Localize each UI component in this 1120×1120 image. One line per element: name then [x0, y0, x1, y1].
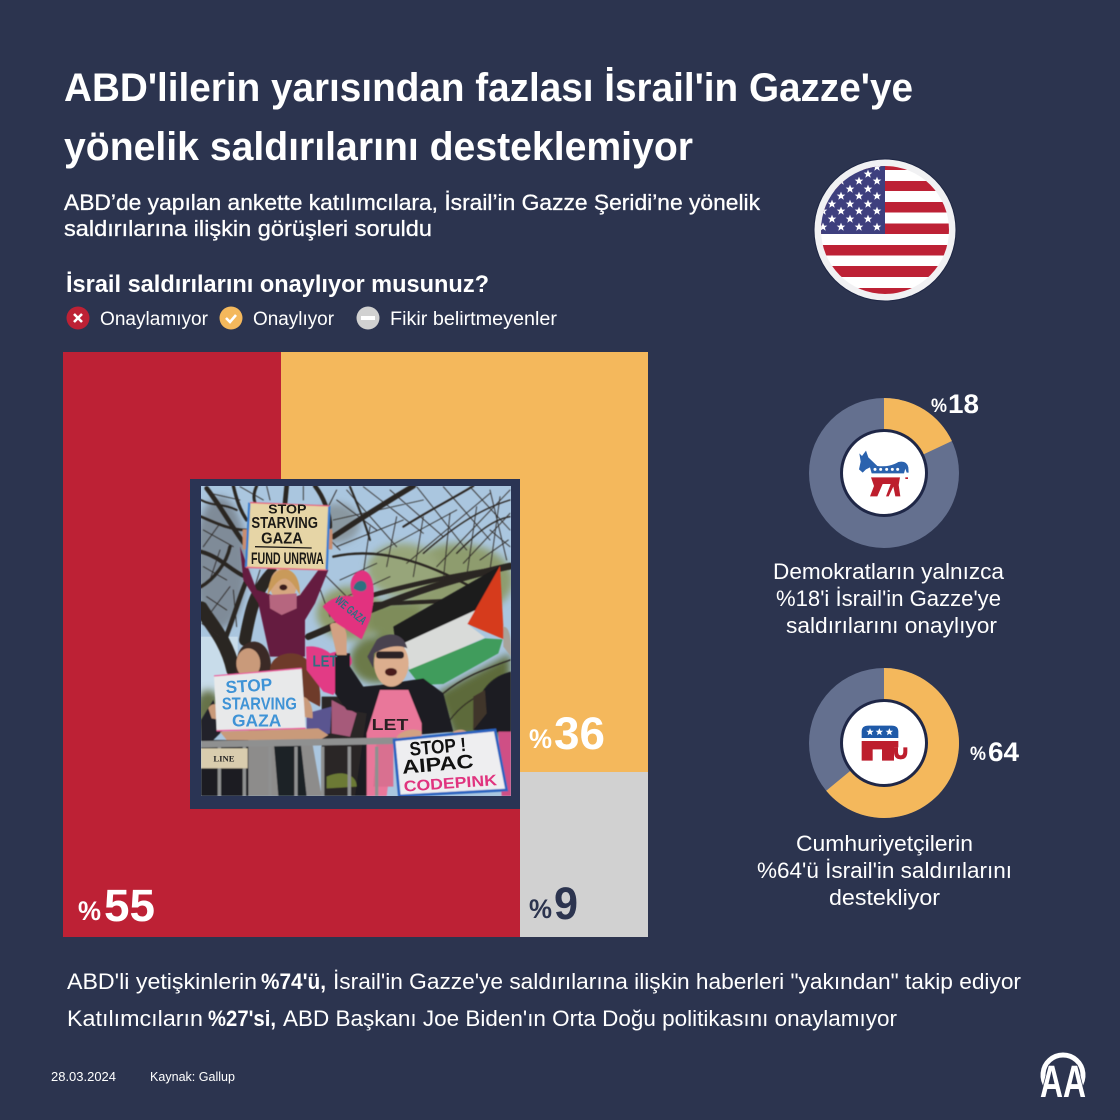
- logo: AA: AA: [1040, 1056, 1086, 1107]
- value: 9: [529, 878, 578, 929]
- sign text: GAZA: [232, 711, 281, 731]
- value: 64: 64: [988, 737, 1019, 767]
- sign text: LET: [312, 654, 338, 671]
- sign text: STARVING: [222, 693, 297, 713]
- caption: Democrats: %18'i İsrail'in Gazze'ye: [776, 586, 1001, 611]
- caption: Republicans: %64'ü İsrail'in saldırılarını: [757, 858, 1012, 883]
- legend item: Onaylıyor: Onaylıyor: [253, 309, 335, 330]
- finding 2: Katılımcıların: [67, 1006, 203, 1031]
- title: yönelik saldırılarını desteklemiyor: [64, 125, 693, 169]
- subtitle: [64, 190, 761, 241]
- legend item: Onaylamıyor: [66, 306, 209, 330]
- chart: proportional area blocks: [63, 352, 648, 937]
- legend: [66, 306, 558, 330]
- subtitle: saldırılarına ilişkin görüşleri soruldu: [64, 216, 432, 241]
- donut: Republicans: [757, 668, 1019, 910]
- legend heading: İsrail saldırılarını onaylıyor musunuz?: [66, 271, 489, 298]
- value: 18: %: [931, 396, 947, 417]
- value: 18: [931, 389, 979, 419]
- sign text: LET: [372, 717, 409, 734]
- value: 55: 55: [104, 880, 155, 931]
- photo: protesters with signs: [190, 479, 520, 809]
- source: Kaynak: Gallup: [150, 1070, 235, 1084]
- value: 36: [529, 708, 605, 759]
- subtitle: ABD’de yapılan ankette katılımcılara, İsrail’in Gazze Şeridi’ne yönelik: [64, 190, 761, 215]
- sign text: GAZA: [261, 530, 303, 547]
- value: 64: %: [970, 744, 986, 765]
- caption: Democrats: saldırılarını onaylıyor: [786, 613, 997, 638]
- caption: Democrats: [773, 559, 1005, 638]
- block: Onaylıyor 36: [281, 352, 648, 772]
- icon: Republican elephant: [840, 699, 928, 787]
- value: 18: 18: [948, 389, 979, 419]
- caption: Republicans: destekliyor: [829, 885, 940, 910]
- finding 2: ABD Başkanı Joe Biden'ın Orta Doğu politikasını onaylamıyor: [283, 1006, 897, 1031]
- donut slice 18: [884, 398, 952, 473]
- sign text: STOP: [268, 501, 307, 516]
- title: ABD'lilerin yarısından fazlası İsrail'in Gazze'ye: [64, 66, 913, 110]
- donut track: [809, 668, 959, 818]
- finding 2: %27'si,: [208, 1006, 276, 1031]
- icon: Democratic donkey: [840, 429, 928, 517]
- value: 9: 9: [554, 878, 578, 929]
- value: 64: [970, 737, 1019, 767]
- sign text: STARVING: [251, 515, 318, 532]
- finding 1: İsrail'in Gazze'ye saldırılarına ilişkin haberleri "yakından" takip ediyor: [333, 969, 1021, 994]
- finding 1: [67, 969, 1021, 994]
- legend item: Fikir belirtmeyenler: Fikir belirtmeyenler: [390, 309, 558, 330]
- donut track: [809, 398, 959, 548]
- donut slice 64: [826, 668, 959, 818]
- finding 1: ABD'li yetişkinlerin: [67, 969, 257, 994]
- icon: US flag: [814, 158, 956, 302]
- caption: Republicans: [757, 831, 1012, 910]
- value: 36: 36: [554, 708, 605, 759]
- sign text: CODEPINK: [403, 772, 497, 796]
- text block: key findings: [67, 969, 1021, 1031]
- caption: Democrats: Demokratların yalnızca: [773, 559, 1005, 584]
- legend item: Onaylıyor: [220, 306, 335, 330]
- sign text: [213, 501, 497, 796]
- sign text: AIPAC: [401, 752, 475, 779]
- date: 28.03.2024: [51, 1070, 116, 1084]
- value: 55: [78, 880, 155, 931]
- block: Onaylamıyor 55: [63, 352, 520, 937]
- donut: Democrats: [773, 389, 1005, 638]
- legend item: Onaylamıyor: Onaylamıyor: [100, 309, 209, 330]
- sign text: WE GAZA: [332, 593, 370, 628]
- title: [64, 66, 913, 169]
- block: Fikir belirtmeyenler 9: [520, 772, 648, 937]
- finding 1: %74'ü,: [261, 969, 326, 994]
- sign text: STOP: [225, 674, 273, 697]
- caption: Republicans: Cumhuriyetçilerin: [796, 831, 973, 856]
- sign text: LINE: [213, 754, 235, 764]
- value: 9: %: [529, 894, 552, 924]
- sign text: STOP !: [409, 735, 467, 761]
- value: 36: %: [529, 724, 552, 754]
- value: 55: %: [78, 896, 101, 926]
- logo: AA: [1040, 1055, 1086, 1107]
- sign text: FUND UNRWA: [251, 549, 324, 568]
